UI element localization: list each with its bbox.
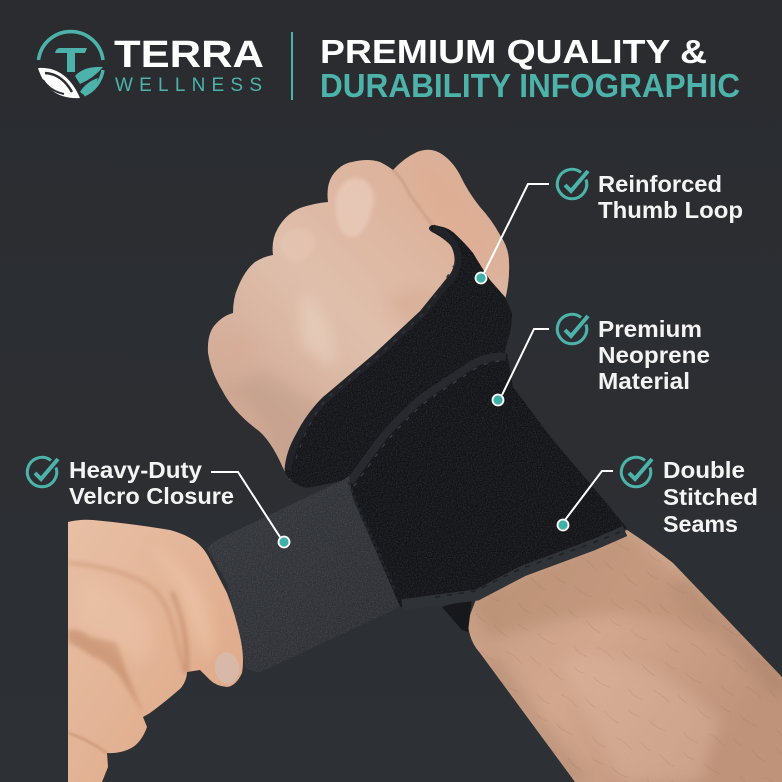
callout: Premium Neoprene Material: Neoprene xyxy=(598,342,710,368)
icon: check badge xyxy=(621,457,652,487)
callout: Double Stitched Seams: Seams xyxy=(663,511,738,537)
icon: check badge xyxy=(557,314,588,344)
wrist brace: upper band xyxy=(285,225,512,488)
wrist brace: velcro closure strap xyxy=(207,476,400,672)
callout: Premium Neoprene Material xyxy=(492,314,710,406)
callout: Reinforced Thumb Loop xyxy=(476,169,743,284)
icon: thumbnail xyxy=(213,650,241,686)
callout: Heavy-Duty Velcro Closure: Velcro Closure xyxy=(69,483,234,509)
title xyxy=(320,33,740,104)
callout: Reinforced Thumb Loop: Reinforced xyxy=(598,171,722,197)
callout: Heavy-Duty Velcro Closure xyxy=(27,457,290,548)
logo: wordmark: WELLNESS xyxy=(115,75,262,96)
callout: Double Stitched Seams xyxy=(558,457,758,537)
callout: Premium Neoprene Material: Material xyxy=(598,368,690,394)
callout: Heavy-Duty Velcro Closure: Heavy-Duty xyxy=(69,457,202,483)
forearm xyxy=(460,520,782,782)
fist xyxy=(208,150,509,480)
logo: Terra Wellness emblem xyxy=(38,32,103,98)
callout: Premium Neoprene Material: Premium xyxy=(598,316,702,342)
logo: wordmark: TERRA xyxy=(114,34,264,76)
logo: wordmark xyxy=(114,34,264,96)
wrist brace: back strap tab xyxy=(442,598,472,632)
title: PREMIUM QUALITY & xyxy=(320,33,707,70)
header divider xyxy=(291,32,293,100)
icon: check badge xyxy=(27,457,58,487)
icon: check badge xyxy=(557,169,588,199)
wrist brace: main neoprene layer xyxy=(347,353,627,607)
callout: Reinforced Thumb Loop: Thumb Loop xyxy=(598,197,743,223)
left hand holding strap xyxy=(68,520,243,782)
callout: Double Stitched Seams: Double xyxy=(663,457,745,483)
callout: Double Stitched Seams: Stitched xyxy=(663,484,758,510)
title: DURABILITY INFOGRAPHIC xyxy=(320,67,740,104)
